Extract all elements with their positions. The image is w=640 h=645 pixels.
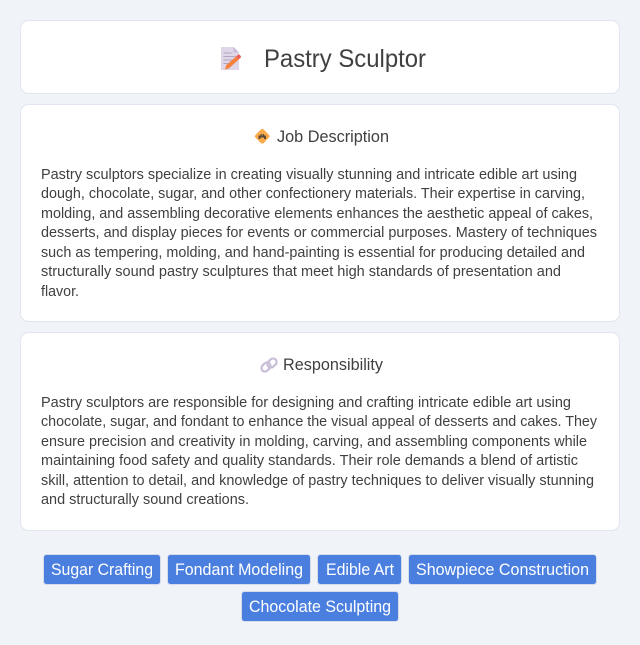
tag: fondant modeling: [168, 554, 310, 584]
text block: responsibility: chocolate, sugar, and fondant to enhance the visual appeal of desserts and cakes. They: [41, 414, 598, 430]
text block: responsibility: Pastry sculptors are responsible for designing and crafting intricate edible art using: [41, 395, 571, 411]
text block: job description: structurally sound pastry sculptures that meet high standards of presentation and: [41, 264, 561, 280]
text block: responsibility: maintaining food safety and quality standards. Their role demands a blend of artistic: [41, 453, 578, 469]
tag: chocolate sculpting: Chocolate Sculpting: [249, 597, 391, 616]
text block: job description: desserts, and display pieces for events or commercial purposes. Mastery of techniques: [41, 225, 597, 241]
text block: responsibility: and structurally sound creations.: [41, 492, 249, 508]
heading: job description: Job Description: [277, 127, 389, 146]
text block: responsibility: skill, attention to detail, and knowledge of pastry techniques to deliver visually stunning: [41, 473, 594, 489]
tag: edible art: [318, 554, 402, 584]
panel: responsibility: [20, 332, 620, 530]
icon: orange diamond sign: [254, 128, 270, 144]
text block: job description: flavor.: [41, 284, 79, 300]
tag: showpiece construction: Showpiece Construction: [416, 560, 589, 579]
text block: job description: molding, and assembling decorative elements enhances the aesthetic appeal of cakes,: [41, 206, 593, 222]
heading: responsibility: Responsibility: [283, 355, 384, 374]
panel: job description: [20, 104, 620, 322]
text block: responsibility: [41, 395, 598, 508]
text block: job description: [41, 167, 597, 300]
panel: header: [20, 20, 620, 94]
tag: chocolate sculpting: [242, 592, 398, 622]
tag: sugar crafting: Sugar Crafting: [51, 560, 153, 579]
title: Pastry Sculptor: [264, 45, 426, 73]
tag: fondant modeling: Fondant Modeling: [175, 560, 303, 579]
tag: edible art: Edible Art: [326, 560, 394, 579]
tag: showpiece construction: [408, 554, 596, 584]
tag: sugar crafting: [44, 554, 160, 584]
text block: job description: dough, chocolate, sugar, and other confectionery materials. Their expertise in carving,: [41, 186, 585, 202]
icon: chain link: [260, 357, 278, 373]
skill tags: [44, 554, 596, 622]
icon: document with pencil: [221, 47, 241, 70]
text block: job description: Pastry sculptors specialize in creating visually stunning and intricate edible art using: [41, 167, 577, 183]
text block: job description: such as tempering, molding, and hand-painting is essential for producing detailed and: [41, 245, 585, 261]
text block: responsibility: ensure precision and creativity in molding, carving, and assembling components while: [41, 434, 587, 450]
